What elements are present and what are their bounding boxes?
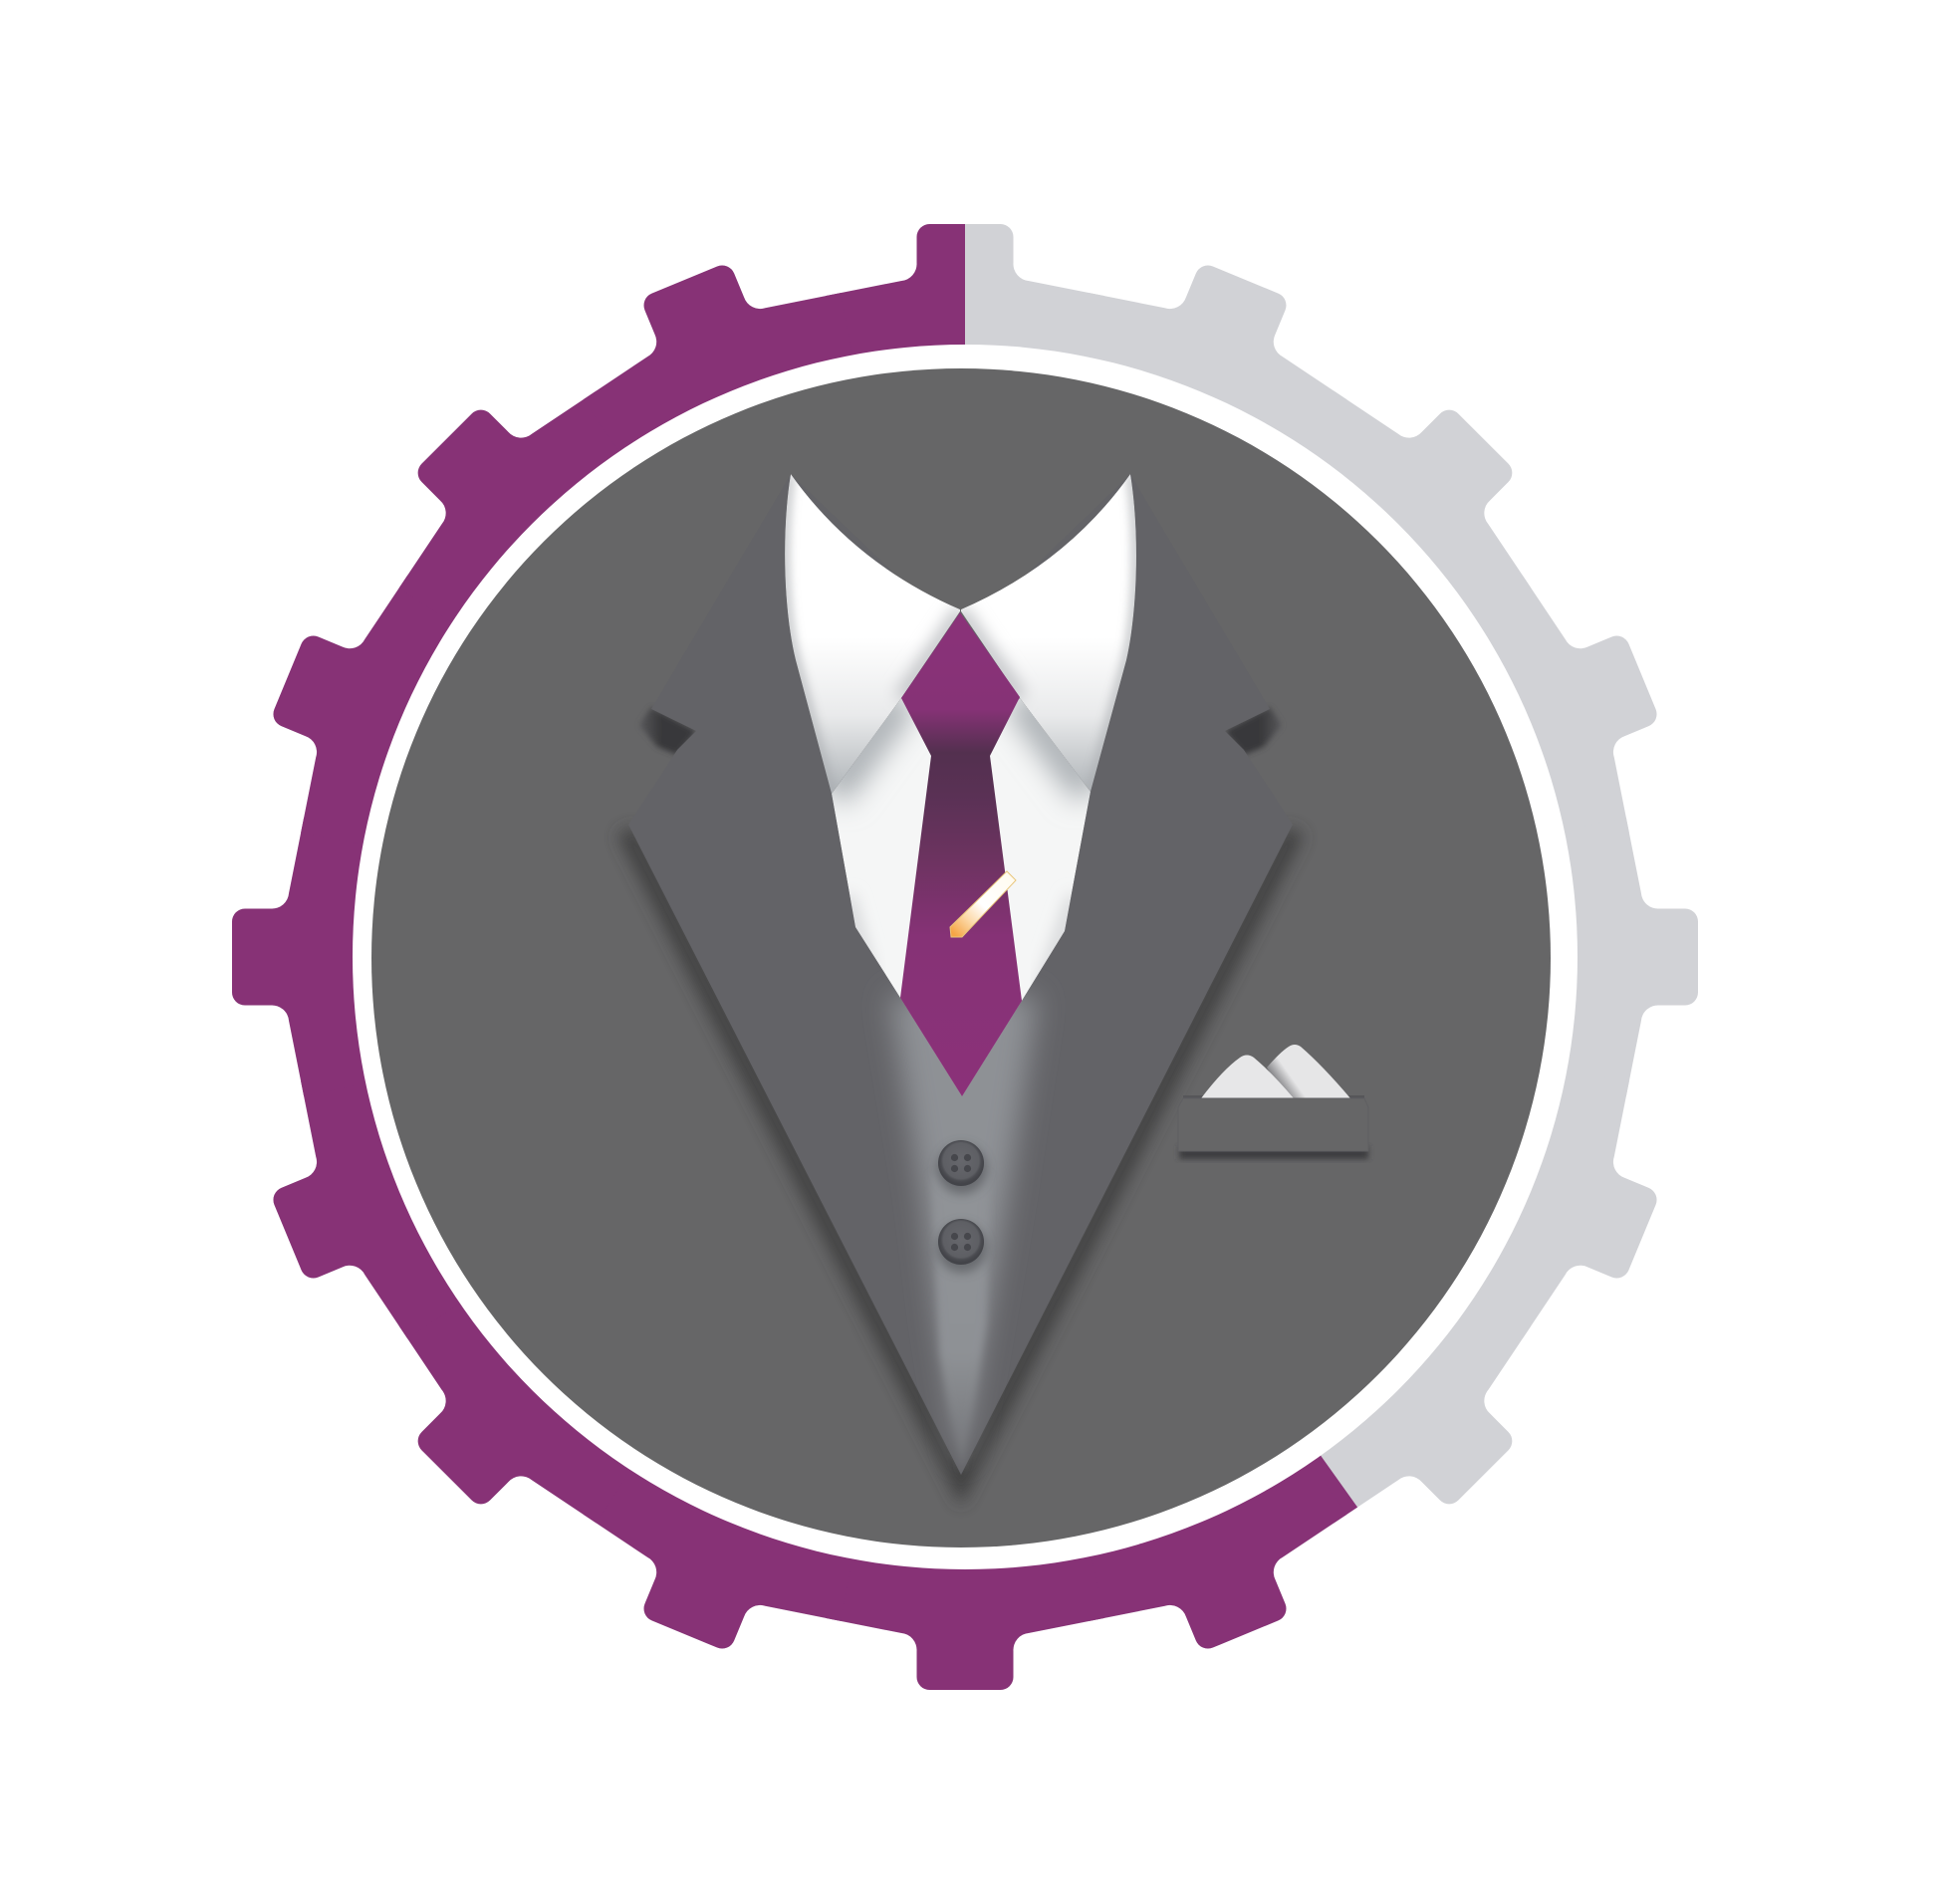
- left lapel notch: [639, 707, 696, 755]
- right lapel notch: [1225, 707, 1282, 755]
- jacket drop shadow: [626, 831, 1295, 1484]
- white ring gap: [353, 345, 1578, 1569]
- gear: purple 60 percent progress ring: [232, 224, 1357, 1690]
- lower waistcoat button: [937, 1219, 987, 1273]
- pocket square front fold: [1201, 1056, 1294, 1098]
- infographic: suit inside progress gear: [232, 224, 1698, 1690]
- pocket square and breast pocket: [1178, 1045, 1368, 1159]
- tie: [900, 612, 1022, 1096]
- pocket shadow: [1179, 1146, 1368, 1159]
- pocket rim: [1183, 1095, 1364, 1100]
- tie clip: [950, 871, 1016, 937]
- right shirt collar: [959, 474, 1136, 792]
- pocket square back fold: [1267, 1045, 1350, 1098]
- left shirt collar: [785, 474, 962, 794]
- icon: suit: [626, 474, 1368, 1484]
- pocket body: [1178, 1098, 1368, 1151]
- shirt front: [832, 698, 1091, 1096]
- upper waistcoat button: [937, 1140, 987, 1194]
- jacket lapels: [628, 474, 1293, 1475]
- waistcoat: [889, 996, 1038, 1472]
- dark central disc: [371, 368, 1551, 1547]
- gear: grey remainder ring: [232, 224, 1698, 1690]
